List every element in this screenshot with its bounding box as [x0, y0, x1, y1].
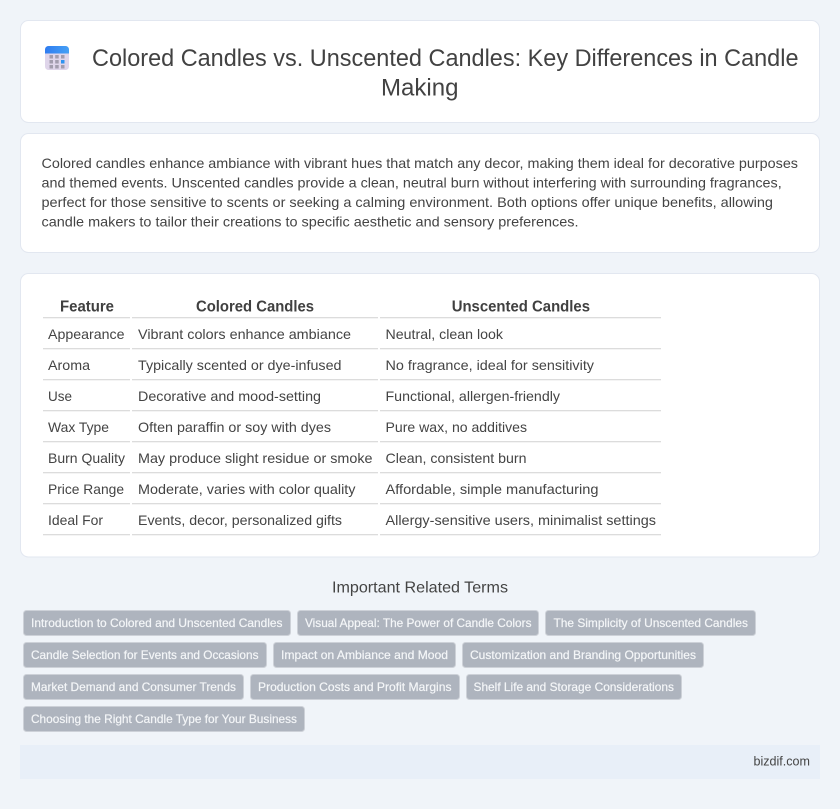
- tag: Candle Selection for Events and Occasions: [31, 648, 258, 662]
- tag: Choosing the Right Candle Type for Your Business: [31, 712, 297, 726]
- panel: introduction text: perfect for those sensitive to scents or seeking a calming environment. Both options offer unique benefits, allowing: [42, 194, 773, 210]
- row: burn quality: Clean, consistent burn: [386, 450, 526, 466]
- title: Making: [381, 74, 458, 102]
- row: price range: Price Range: [48, 481, 124, 497]
- table header row: Unscented Candles: [452, 298, 590, 316]
- tag: [250, 674, 460, 700]
- row: ideal for: Events, decor, personalized gifts: [138, 512, 342, 528]
- row: aroma: Typically scented or dye-infused: [138, 357, 342, 373]
- table header row: Feature: [60, 298, 114, 316]
- row: burn quality: May produce slight residue or smoke: [138, 450, 373, 466]
- tag: Shelf Life and Storage Considerations: [474, 680, 674, 694]
- row: price range: [48, 481, 598, 497]
- row: use: [48, 388, 560, 404]
- tag: [298, 610, 538, 636]
- footer: bizdif.com: [754, 754, 810, 769]
- panel: comparison table: [20, 274, 820, 557]
- panel: related term tags: [24, 610, 756, 732]
- tag: Customization and Branding Opportunities: [470, 648, 696, 662]
- tag: Market Demand and Consumer Trends: [31, 680, 236, 694]
- tag: The Simplicity of Unscented Candles: [554, 616, 748, 630]
- title: [92, 45, 798, 102]
- tag: [546, 610, 756, 636]
- tag: Impact on Ambiance and Mood: [281, 648, 448, 662]
- row: aroma: [48, 357, 594, 373]
- row: ideal for: [48, 512, 656, 528]
- title: Colored Candles vs. Unscented Candles: Key Differences in Candle: [92, 45, 798, 72]
- row: use: Use: [48, 388, 72, 404]
- row: appearance: Appearance: [48, 326, 125, 342]
- row: aroma: Aroma: [48, 357, 90, 373]
- panel: introduction text: and themed events. Unscented candles provide a clean, neutral burn without interfering with surrounding fragrances,: [42, 174, 782, 190]
- row: wax type: [48, 419, 527, 435]
- row: burn quality: [48, 450, 526, 466]
- row: burn quality: Burn Quality: [48, 450, 125, 466]
- row: ideal for: Ideal For: [48, 512, 103, 528]
- tag: [24, 642, 266, 668]
- panel: introduction text: [20, 134, 820, 252]
- heading: important related terms: Important Related Terms: [332, 580, 508, 597]
- panel: introduction text: Colored candles enhance ambiance with vibrant hues that match any decor, making them ideal for decorative purposes: [42, 155, 798, 171]
- tag: [462, 642, 704, 668]
- row: price range: Moderate, varies with color quality: [138, 481, 356, 497]
- footer: [20, 745, 820, 779]
- table header row: [60, 298, 590, 316]
- row: use: Functional, allergen-friendly: [386, 388, 560, 404]
- panel: introduction text: candle makers to tailor their creations to specific aesthetic and sensory preferences.: [42, 214, 578, 230]
- row: wax type: Wax Type: [48, 419, 109, 435]
- row: appearance: Vibrant colors enhance ambiance: [138, 326, 351, 342]
- row: appearance: Neutral, clean look: [386, 326, 504, 342]
- row: aroma: No fragrance, ideal for sensitivity: [386, 357, 594, 373]
- tag: [274, 642, 456, 668]
- row: ideal for: Allergy-sensitive users, minimalist settings: [386, 512, 656, 528]
- icon: calendar: [45, 46, 69, 70]
- tag: [24, 610, 290, 636]
- row: wax type: Often paraffin or soy with dyes: [138, 419, 331, 435]
- row: price range: Affordable, simple manufacturing: [386, 481, 598, 497]
- tag: [24, 706, 304, 732]
- row: use: Decorative and mood-setting: [138, 388, 321, 404]
- tag: Visual Appeal: The Power of Candle Colors: [305, 616, 532, 630]
- panel: header: [20, 20, 820, 122]
- row: wax type: Pure wax, no additives: [386, 419, 527, 435]
- tag: [466, 674, 682, 700]
- table header row: Colored Candles: [196, 298, 314, 316]
- tag: Production Costs and Profit Margins: [258, 680, 452, 694]
- tag: [24, 674, 244, 700]
- row: appearance: [48, 326, 504, 342]
- tag: Introduction to Colored and Unscented Candles: [31, 616, 282, 630]
